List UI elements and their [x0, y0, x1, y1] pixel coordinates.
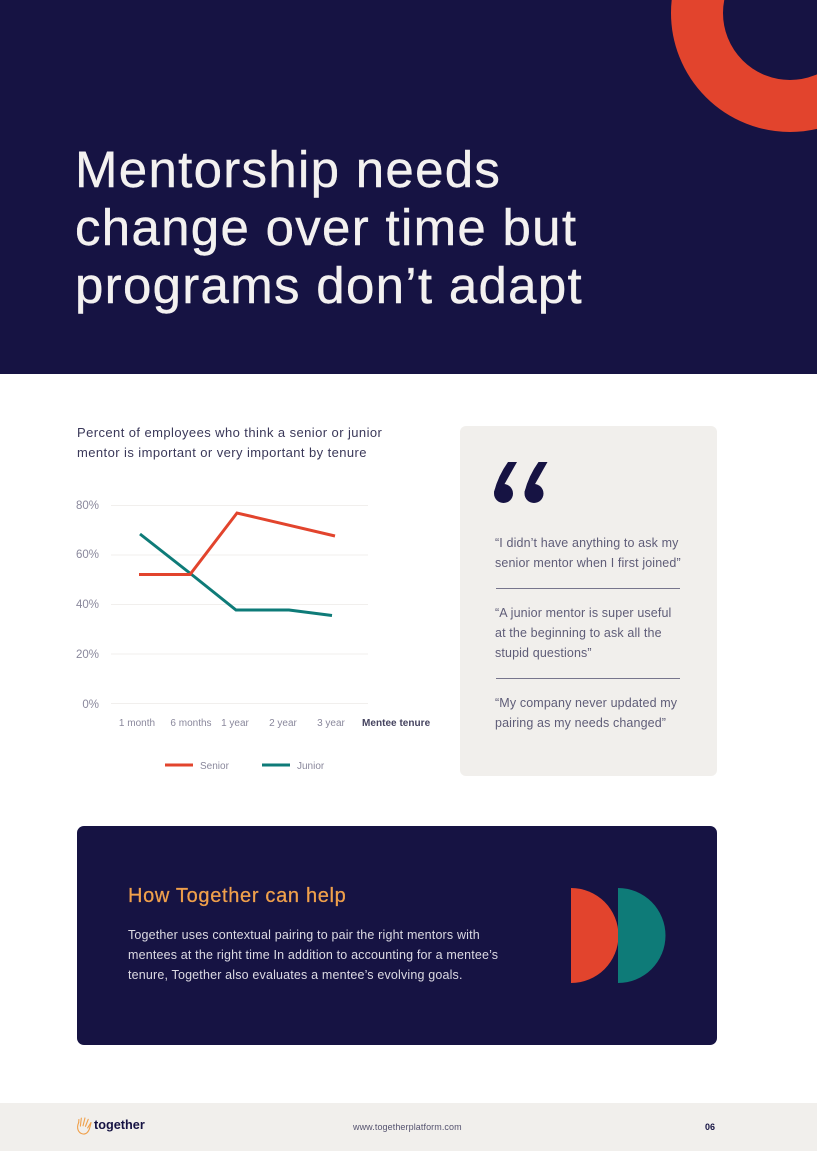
chart heading: Percent of employees who think a senior or junior [77, 425, 382, 440]
quote 1 [495, 536, 681, 570]
line chart: 3 year [317, 718, 346, 729]
quote 2 [495, 606, 671, 660]
line chart: Junior [297, 761, 325, 772]
quote 2: at the beginning to ask all the [495, 626, 662, 640]
quote 2: stupid questions” [495, 646, 592, 660]
logo wordmark: together [94, 1118, 145, 1132]
help heading: How Together can help [128, 885, 346, 907]
chart heading: mentor is important or very important by tenure [77, 445, 367, 460]
line chart: 60% [76, 549, 99, 561]
title: Mentorship needs [75, 141, 501, 198]
help text: mentees at the right time In addition to accounting for a mentee’s [128, 948, 498, 962]
line chart: Mentee tenure [362, 718, 431, 729]
line chart: 1 month [119, 718, 155, 729]
quote 3: “My company never updated my [495, 696, 677, 710]
chart heading [77, 425, 382, 460]
help text [128, 928, 498, 982]
decorative ring [671, 0, 817, 132]
line chart [76, 500, 431, 772]
icon: hand logo [77, 1117, 92, 1135]
line chart: 1 year [221, 718, 250, 729]
line chart: Senior [200, 761, 230, 772]
quote 1: senior mentor when I first joined” [495, 556, 681, 570]
title: programs don’t adapt [75, 257, 583, 314]
quote 1: “I didn’t have anything to ask my [495, 536, 679, 550]
footer [0, 1103, 817, 1151]
line chart: 40% [76, 599, 99, 611]
quote 3: pairing as my needs changed” [495, 716, 666, 730]
quote 2: “A junior mentor is super useful [495, 606, 671, 620]
line chart: 80% [76, 500, 99, 512]
header band [0, 0, 817, 374]
quotes panel [460, 426, 717, 776]
line chart: 20% [76, 649, 99, 661]
title [75, 141, 583, 314]
website: www.togetherplatform.com [353, 1122, 462, 1132]
title: change over time but [75, 199, 577, 256]
page number: 06 [705, 1122, 715, 1132]
help text: Together uses contextual pairing to pair the right mentors with [128, 928, 480, 942]
line chart: 6 months [170, 718, 212, 729]
quote 3 [495, 696, 677, 730]
line chart: 2 year [269, 718, 298, 729]
icon: quotation marks [494, 462, 548, 503]
help text: tenure, Together also evaluates a mentee’s evolving goals. [128, 968, 463, 982]
panel: how Together can help [77, 826, 717, 1045]
line chart: 0% [82, 699, 99, 711]
